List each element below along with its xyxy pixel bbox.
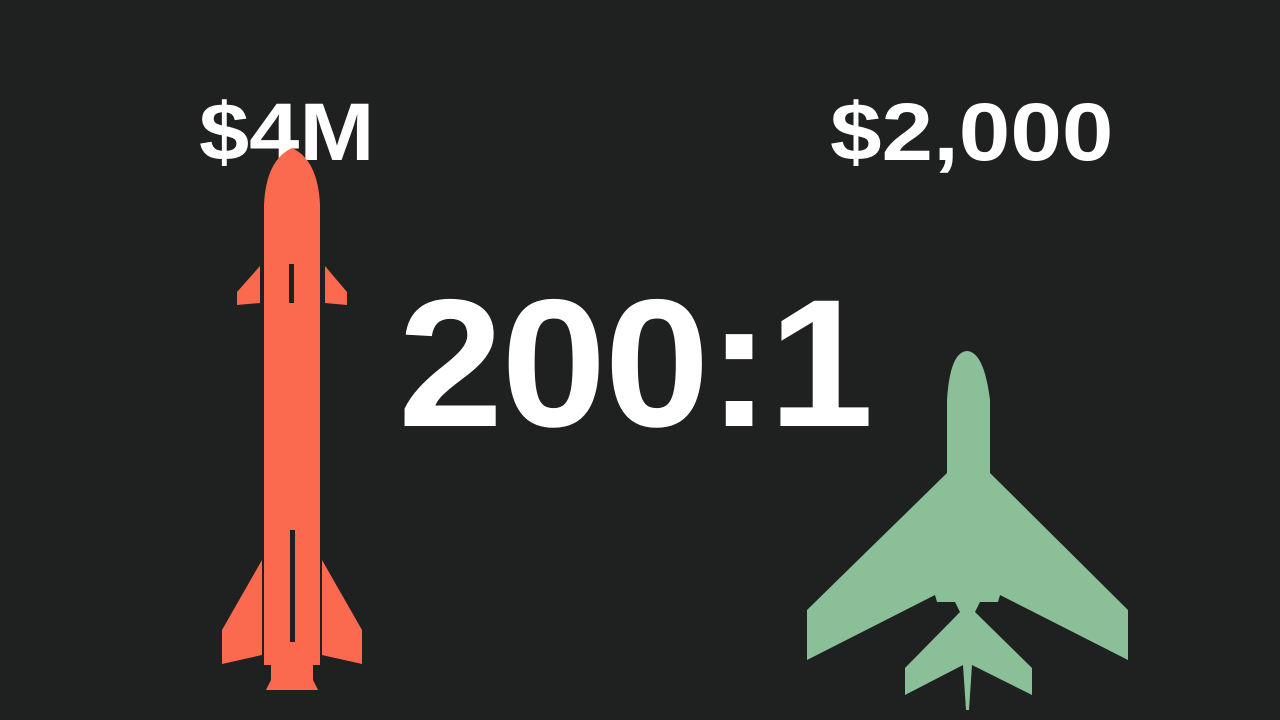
ratio headline: 200:1 bbox=[398, 261, 872, 465]
label: missile price: $4M bbox=[199, 87, 374, 178]
label: drone price: $2,000 bbox=[830, 87, 1113, 178]
